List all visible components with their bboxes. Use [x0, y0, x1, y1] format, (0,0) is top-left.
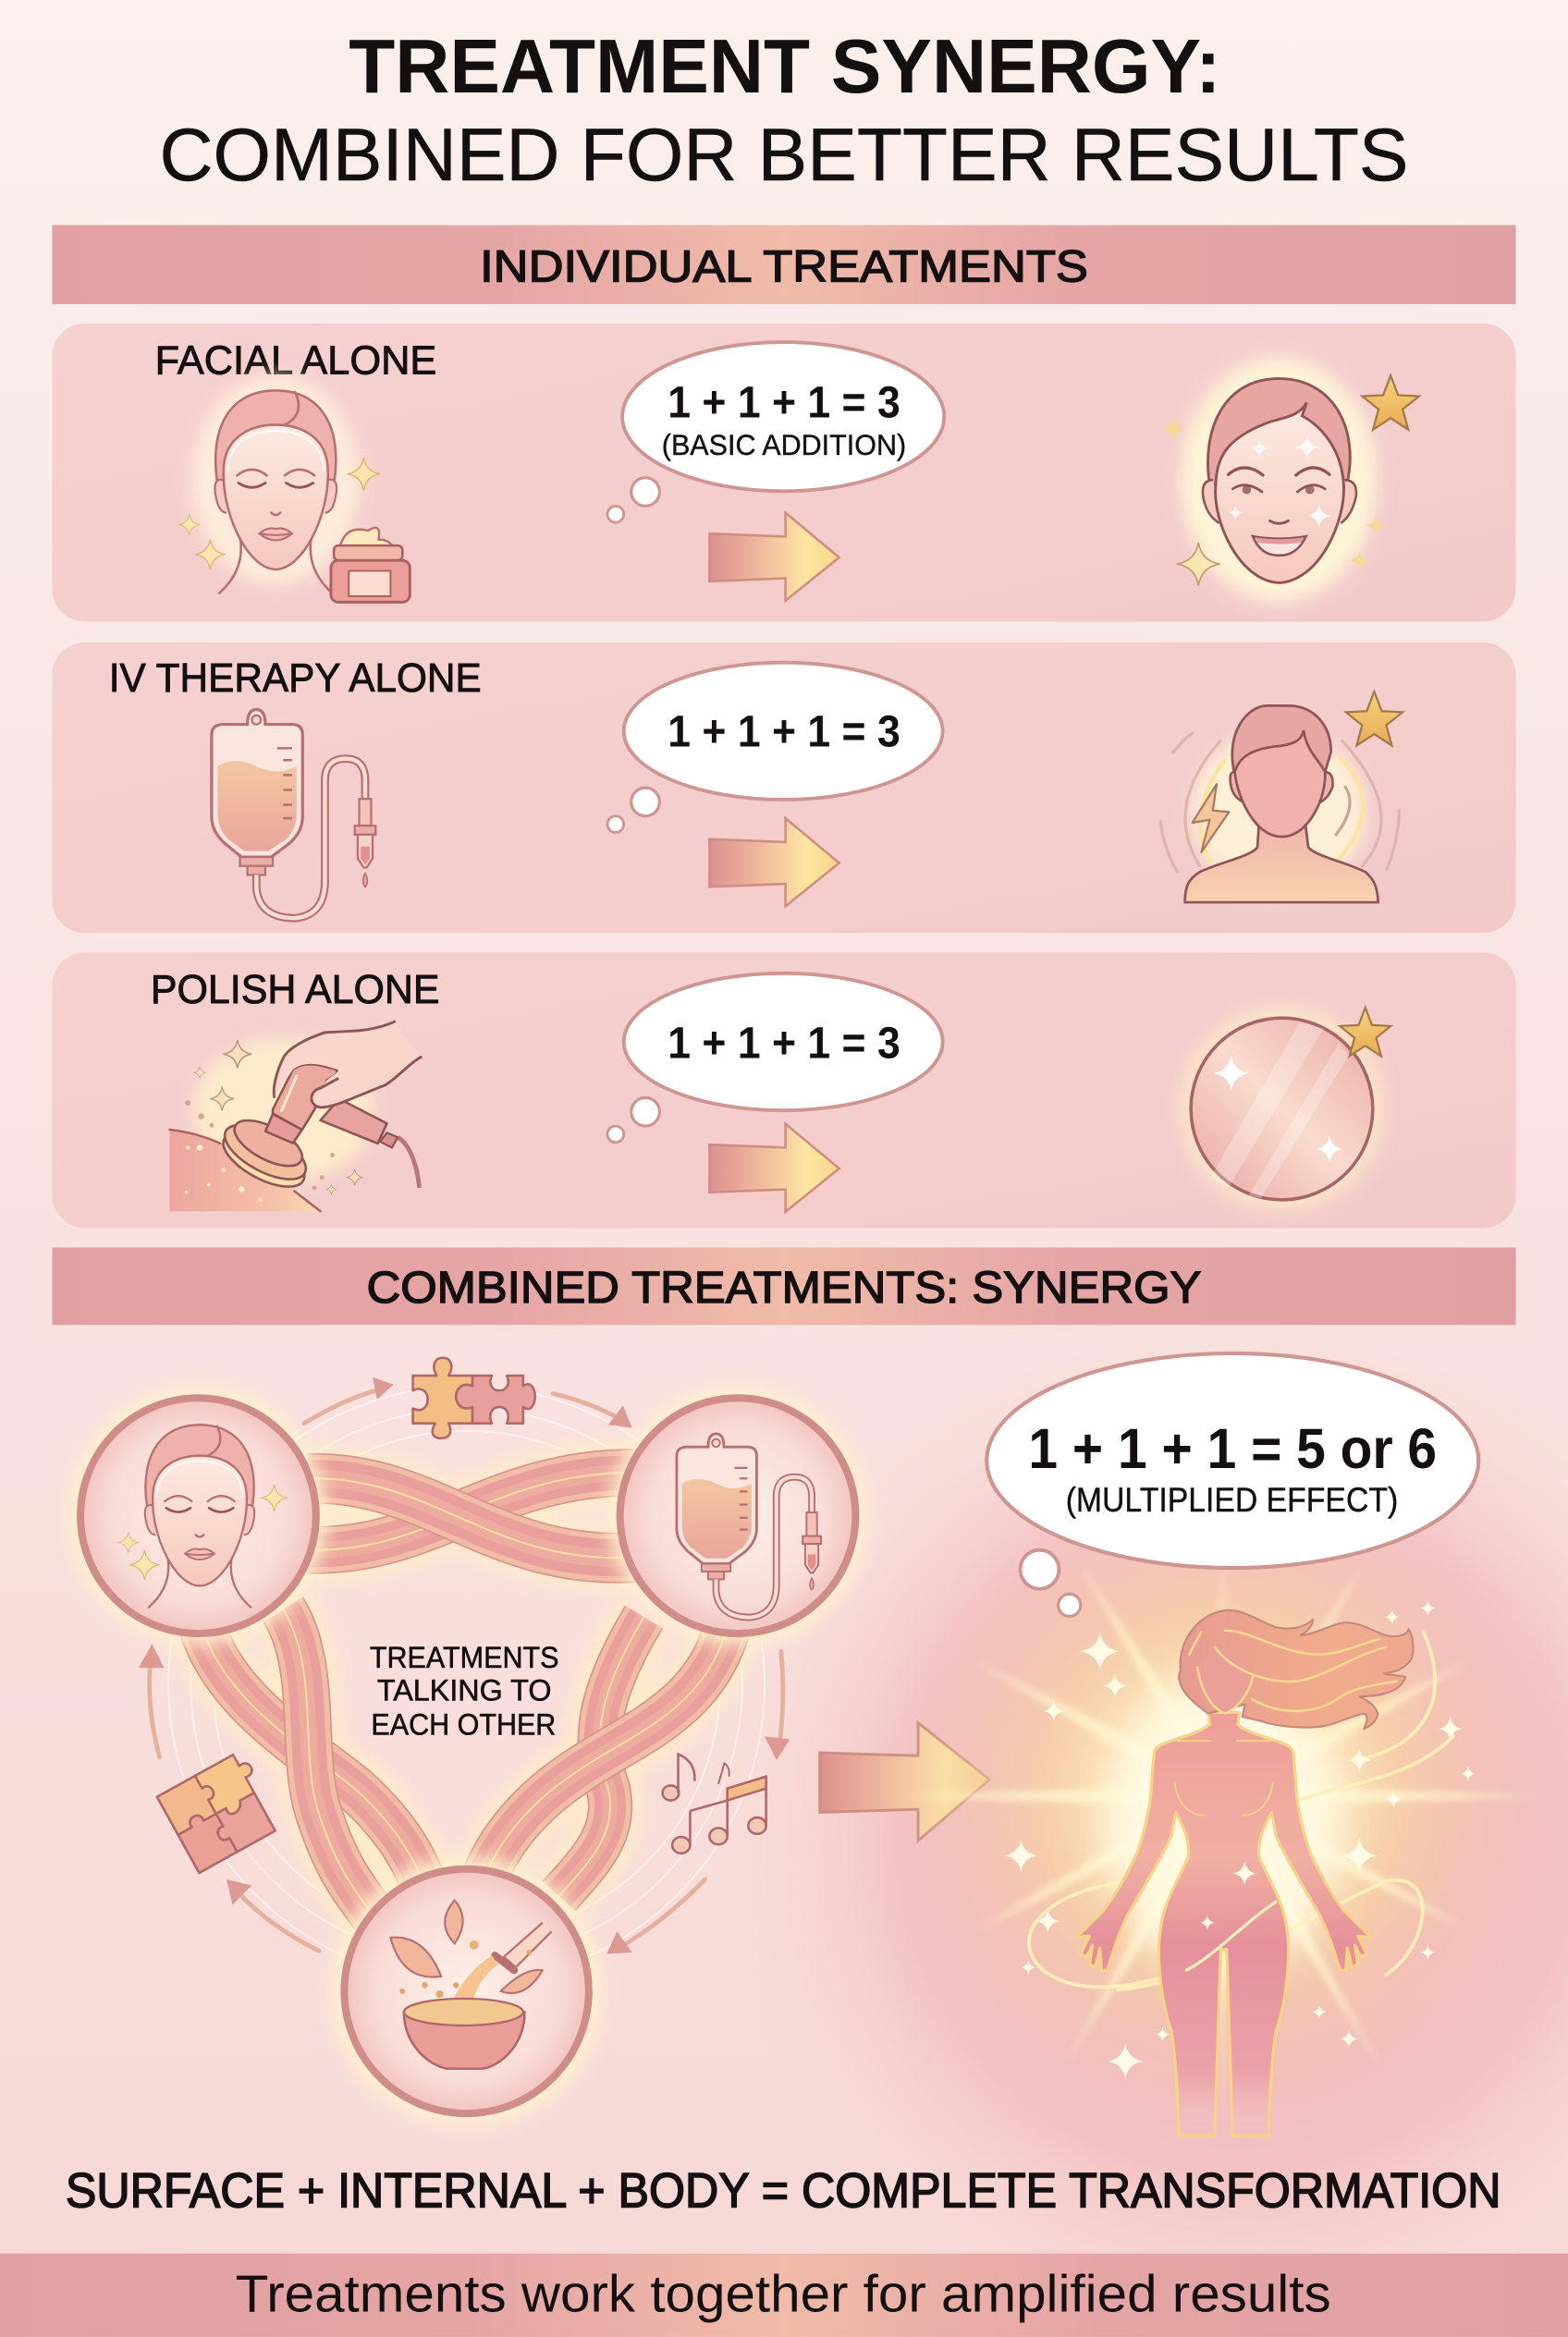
background glow: synergy area: [701, 1327, 1568, 2254]
icon: relaxed face with cream jar: [178, 375, 410, 602]
arrow: iv to notes: [765, 1651, 790, 1760]
section header: individual treatments: [52, 225, 1516, 304]
thought bubble: multiplied effect: (MULTIPLIED EFFECT): [1066, 1480, 1398, 1519]
footer band: Treatments work together for amplified results: [236, 2265, 1331, 2323]
glowing woman figure: [901, 1475, 1543, 2135]
thought bubble: 1+1+1=3 basic addition: 1 + 1 + 1 = 3: [668, 377, 900, 427]
thought bubble: 1+1+1=3 basic addition: (BASIC ADDITION): [662, 429, 906, 461]
circle: iv therapy: [609, 1388, 866, 1644]
thought bubble: 1+1+1=3: 1 + 1 + 1 = 3: [668, 707, 900, 757]
flowing hair: [1179, 1610, 1414, 1729]
icon: hand holding polishing device: [169, 1022, 421, 1211]
body silhouette: [1076, 1712, 1371, 2135]
text: treatments talking to each other: TALKING TO: [377, 1674, 552, 1707]
arrow: notes to bowl: [606, 1879, 705, 1954]
footer band: [0, 2254, 1568, 2337]
panel: polish alone: [52, 952, 1516, 1228]
icon: left puzzle: [157, 1750, 284, 1873]
light rays: [901, 1550, 1543, 2123]
swirls: [1029, 1632, 1453, 1989]
thought bubble: multiplied effect: 1 + 1 + 1 = 5 or 6: [1028, 1417, 1437, 1480]
panel: iv therapy alone: [52, 642, 1516, 933]
text: treatments talking to each other: [370, 1641, 559, 1742]
arrow: synergy to result: [820, 1723, 989, 1841]
icon: music notes: [663, 1755, 766, 1854]
faint concentric arcs: [168, 1386, 765, 1982]
thought bubble: 1+1+1=3: [607, 663, 943, 832]
radiant burst: [901, 1475, 1543, 2116]
interwoven ribbons: [202, 1473, 726, 1918]
arrow: left puzzle to facial: [139, 1644, 164, 1757]
thought bubble: multiplied effect: [986, 1353, 1478, 1616]
text: treatments talking to each other: EACH OTHER: [371, 1708, 556, 1742]
arrow: facial to puzzle: [304, 1377, 394, 1424]
arrow: puzzle to iv: [553, 1393, 632, 1428]
thought bubble: 1+1+1=3 basic addition: [607, 342, 944, 522]
title: TREATMENT SYNERGY:: [349, 25, 1220, 109]
circle: facial: [70, 1388, 326, 1644]
section header: combined treatments: COMBINED TREATMENTS: SYNERGY: [367, 1263, 1201, 1313]
circle: polish bowl and herbs: [333, 1857, 601, 2125]
icon: polished mirror sphere with star: [1181, 1008, 1390, 1210]
summary equation: SURFACE + INTERNAL + BODY = COMPLETE TRANSFORMATION: [66, 2164, 1501, 2219]
icon: top puzzle: [413, 1358, 535, 1438]
icon: iv bag: [212, 709, 375, 918]
arrow: [709, 513, 839, 601]
text: treatments talking to each other: TREATMENTS: [370, 1641, 559, 1674]
arrow: [709, 818, 839, 906]
section header: individual treatments: INDIVIDUAL TREATMENTS: [480, 242, 1088, 292]
heading: iv therapy alone: IV THERAPY ALONE: [109, 656, 482, 701]
icon: energized person with star: [1160, 691, 1403, 902]
collarbone and chest lines: [1174, 1741, 1273, 1816]
thought bubble: 1+1+1=3: 1 + 1 + 1 = 3: [668, 1019, 900, 1069]
icon: glowing smiling face with star: [1161, 358, 1419, 602]
arrow: bowl to left puzzle: [227, 1879, 319, 1951]
heading: polish alone: POLISH ALONE: [151, 968, 440, 1012]
heading: facial alone: FACIAL ALONE: [155, 339, 436, 384]
central glow around body: [1108, 1677, 1340, 1975]
title: COMBINED FOR BETTER RESULTS: [160, 114, 1408, 197]
thought bubble: 1+1+1=3: [607, 973, 943, 1143]
panel: facial alone: [52, 324, 1516, 621]
sparkles: [1005, 1601, 1476, 2079]
synergy triangle diagram: [70, 1358, 866, 2125]
title: [160, 25, 1408, 197]
crossing light swirl: [1186, 1902, 1276, 1970]
section header: combined treatments: [52, 1247, 1516, 1325]
arrow: [709, 1124, 839, 1212]
